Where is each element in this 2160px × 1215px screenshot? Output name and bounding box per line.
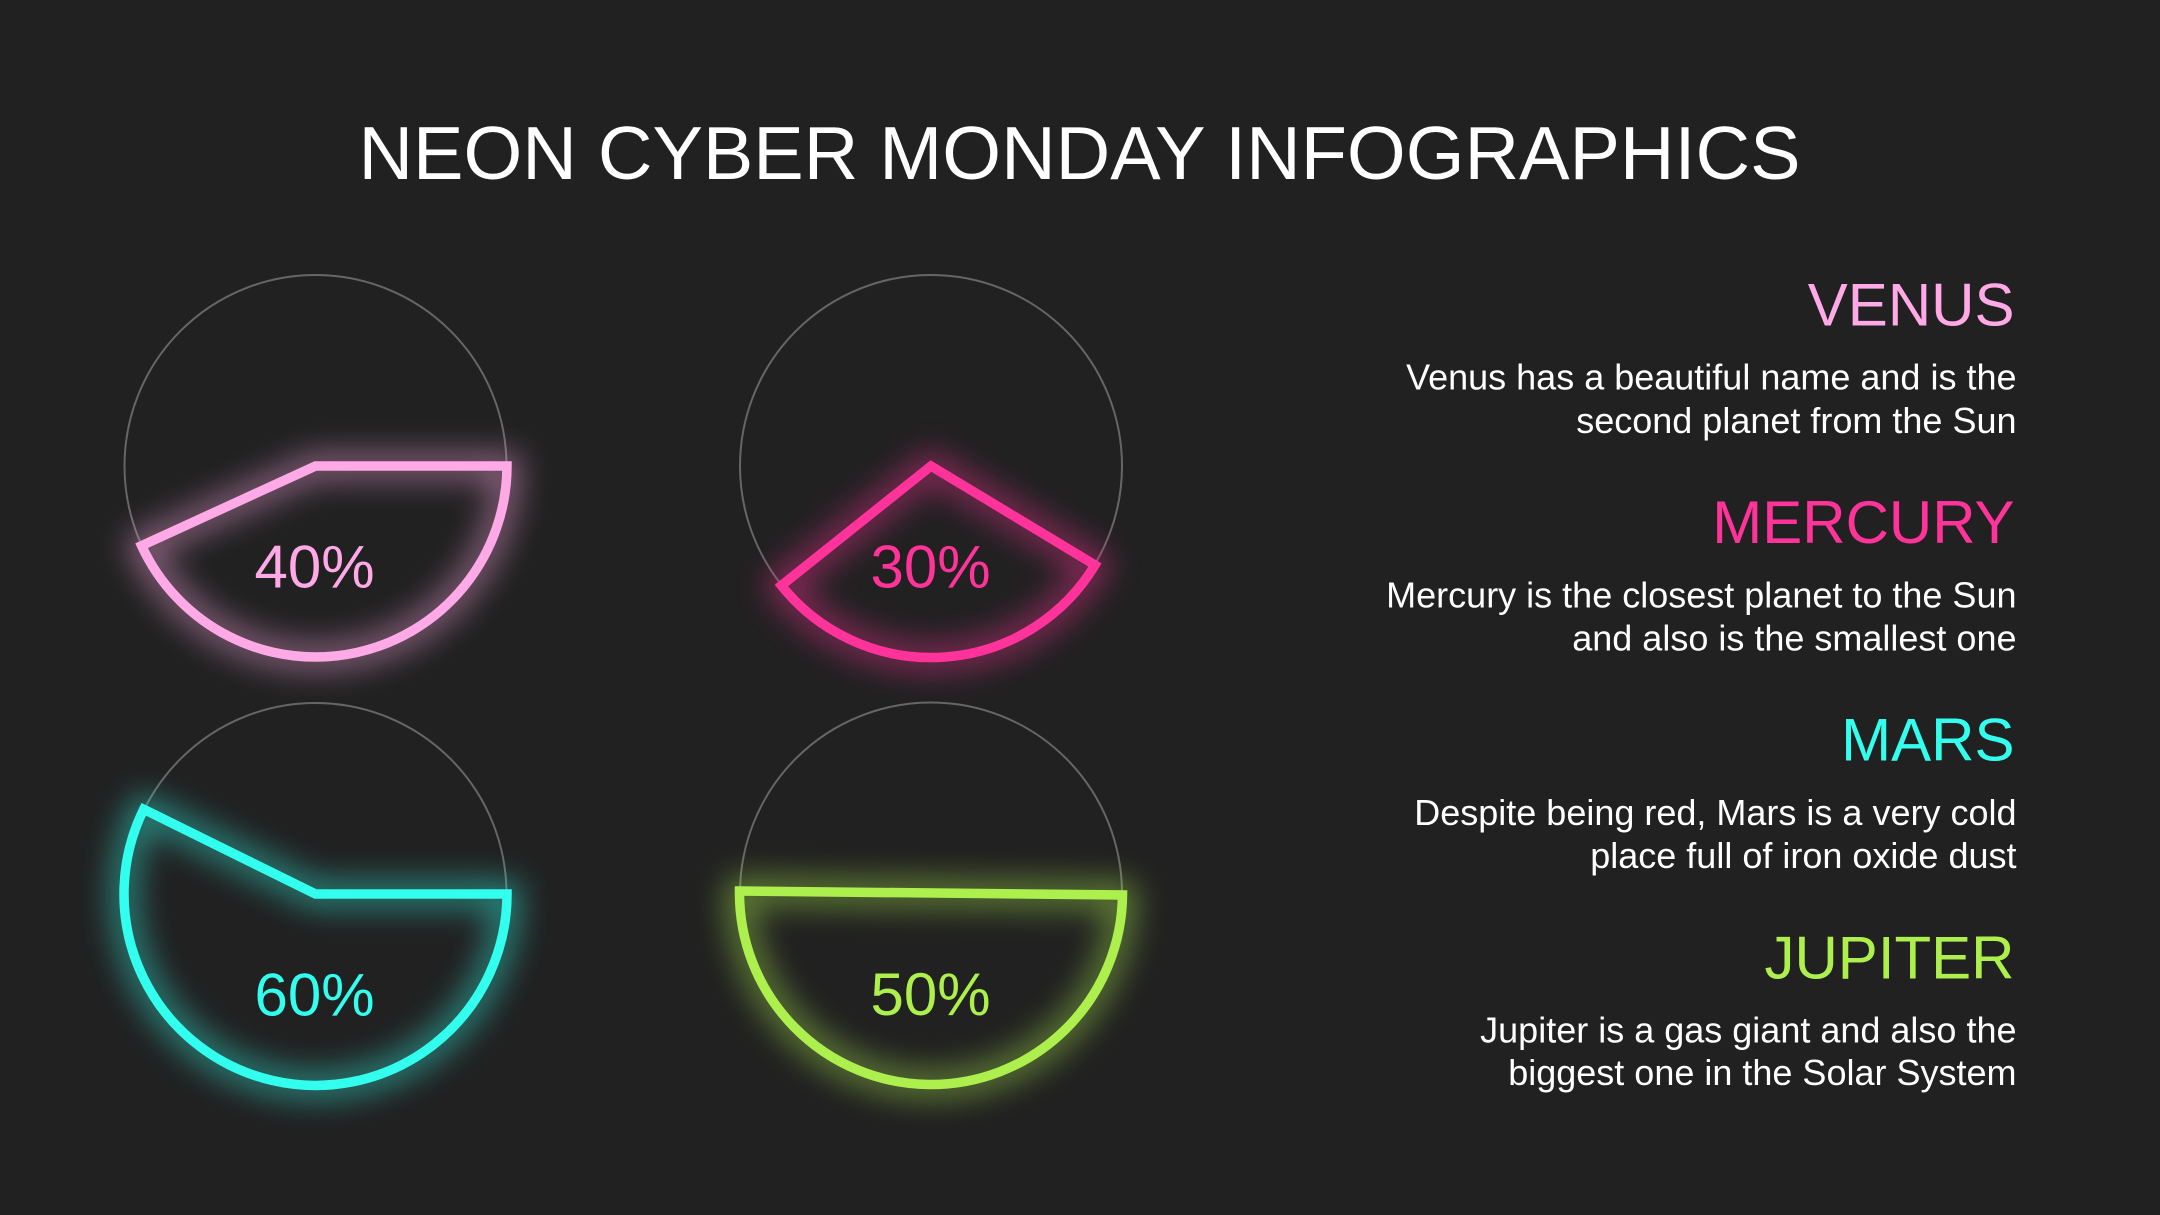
- text block: Mercury: MERCURY: [1712, 489, 2014, 556]
- text block: Mercury: Mercury is the closest planet to the Sun: [1386, 575, 2016, 616]
- text block: Mercury: [1386, 489, 2016, 658]
- text block: Venus: VENUS: [1808, 272, 2014, 338]
- title: NEON CYBER MONDAY INFOGRAPHICS: [358, 112, 1801, 196]
- chart: Mars 60%: 60%: [254, 962, 375, 1028]
- text block: Jupiter: [1480, 924, 2016, 1093]
- chart: Mercury 30%: [740, 275, 1122, 658]
- text block: Mars: Despite being red, Mars is a very cold: [1414, 792, 2016, 833]
- text block: Mars: [1414, 706, 2016, 876]
- text block: Venus: Venus has a beautiful name and is the: [1406, 357, 2016, 398]
- text block: Jupiter: JUPITER: [1764, 924, 2014, 992]
- chart: Venus 40%: 40%: [254, 534, 375, 600]
- chart: Venus 40%: [124, 275, 507, 657]
- chart: Jupiter 50%: 50%: [870, 961, 991, 1028]
- chart: Mercury 30%: 30%: [870, 534, 991, 600]
- text block: Venus: [1406, 272, 2016, 441]
- chart: Jupiter 50%: [739, 702, 1122, 1085]
- text block: Jupiter: Jupiter is a gas giant and also the: [1480, 1010, 2016, 1050]
- chart: Mars 60%: [124, 703, 507, 1085]
- text block: Mercury: and also is the smallest one: [1572, 618, 2016, 658]
- text block: Mars: MARS: [1841, 706, 2014, 774]
- text block: Venus: second planet from the Sun: [1576, 400, 2016, 441]
- text block: Jupiter: biggest one in the Solar System: [1508, 1052, 2016, 1093]
- text block: Mars: place full of iron oxide dust: [1590, 835, 2016, 876]
